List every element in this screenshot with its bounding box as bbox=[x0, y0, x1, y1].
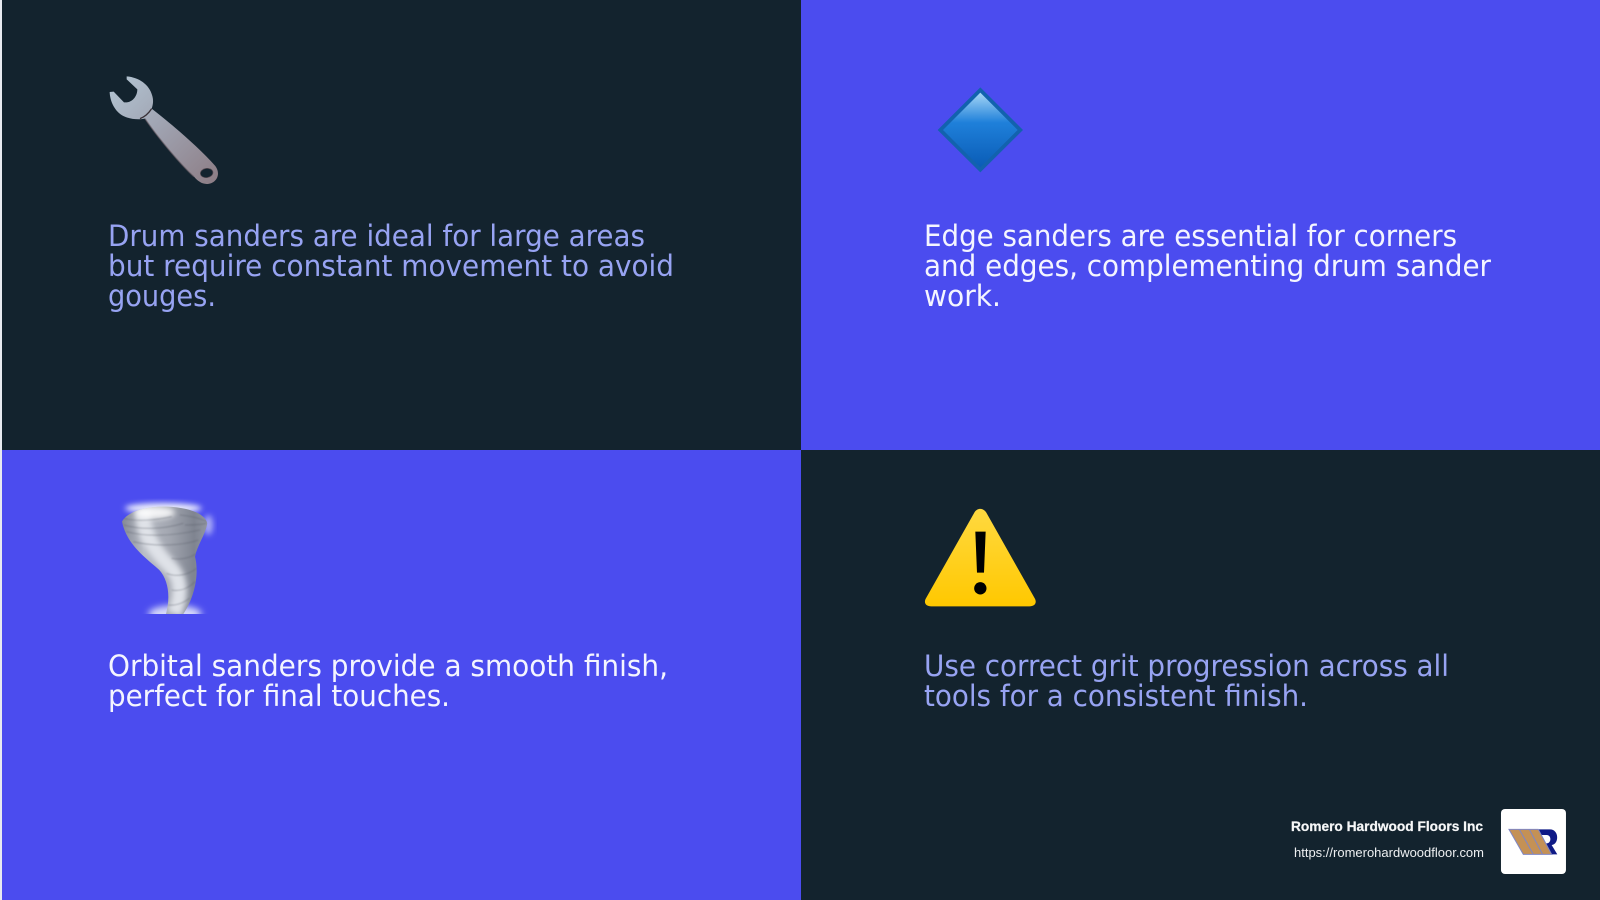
panel: grit progression bbox=[801, 450, 1600, 900]
text: grit progression: Use correct grit progression across all bbox=[924, 649, 1449, 683]
text: edge sanders: work. bbox=[924, 279, 1001, 313]
icon: wrench bbox=[110, 76, 218, 184]
company name: Romero Hardwood Floors Inc bbox=[1291, 818, 1483, 834]
panel: edge sanders bbox=[801, 0, 1600, 450]
icon: blue diamond bbox=[938, 87, 1023, 172]
text: edge sanders: Edge sanders are essential for corners bbox=[924, 219, 1457, 253]
panel: drum sanders bbox=[2, 0, 801, 450]
panel: orbital sanders bbox=[2, 450, 801, 900]
text: orbital sanders: Orbital sanders provide a smooth finish, bbox=[108, 649, 668, 683]
text: drum sanders bbox=[108, 219, 674, 313]
text: grit progression bbox=[924, 649, 1449, 713]
company url: https://romerohardwoodfloor.com bbox=[1294, 846, 1484, 860]
icon: tornado bbox=[117, 503, 213, 623]
logo bbox=[1501, 809, 1566, 874]
text: edge sanders: and edges, complementing drum sander bbox=[924, 249, 1492, 283]
text: grit progression: tools for a consistent finish. bbox=[924, 679, 1308, 713]
text: orbital sanders bbox=[108, 649, 668, 713]
text: drum sanders: Drum sanders are ideal for large areas bbox=[108, 219, 645, 253]
text: orbital sanders: perfect for final touches. bbox=[108, 679, 450, 713]
text: drum sanders: but require constant movement to avoid bbox=[108, 249, 674, 283]
icon: warning triangle bbox=[925, 509, 1036, 606]
text: drum sanders: gouges. bbox=[108, 279, 216, 313]
footer: company brand bbox=[1291, 809, 1566, 874]
page edge bbox=[0, 0, 2, 900]
text: edge sanders bbox=[924, 219, 1492, 313]
